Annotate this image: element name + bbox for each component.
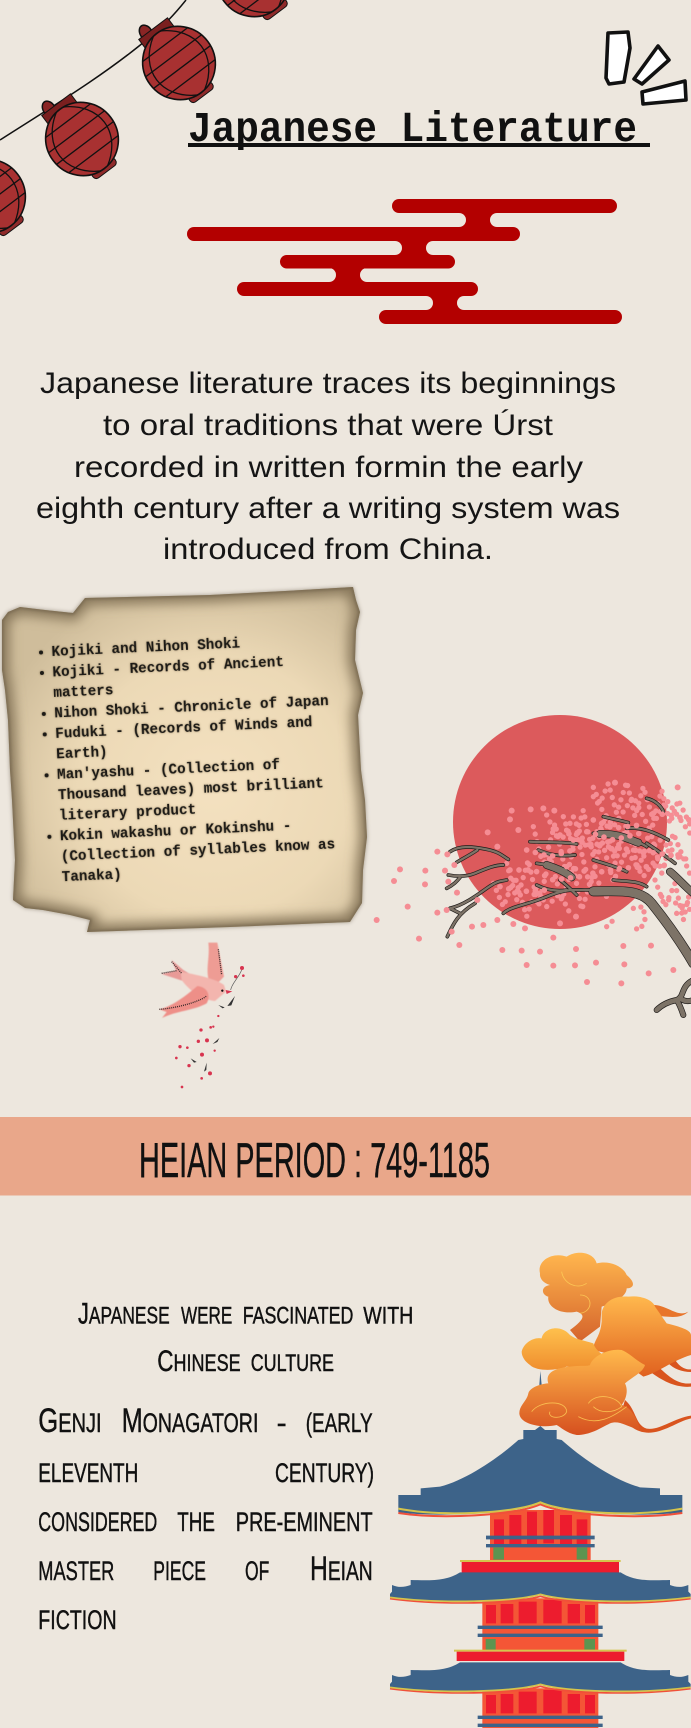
lantern string decoration bbox=[0, 0, 310, 253]
heading: fascination with Chinese culture: JAPANESE bbox=[78, 1298, 170, 1330]
middle roof bbox=[390, 1572, 691, 1603]
text block: Genji Monogatari description: MONAGATORI bbox=[122, 1402, 258, 1440]
intro paragraph: eighth century after a writing system was bbox=[36, 492, 620, 525]
panel: torn parchment list bbox=[2, 587, 367, 932]
banner: Heian period bbox=[0, 1117, 691, 1196]
lantern: left edge bbox=[0, 130, 46, 253]
blossoms in front of branches bbox=[500, 813, 690, 892]
text block: Genji Monogatari description: PRE-EMINENT bbox=[236, 1507, 373, 1537]
text block: Genji Monogatari description: FICTION bbox=[38, 1605, 117, 1635]
pagoda body tier 2 bbox=[454, 1598, 627, 1661]
illustration: swallow with blossoms bbox=[159, 943, 245, 1088]
list text: literary product bbox=[59, 803, 197, 825]
text block: Genji Monogatari description bbox=[38, 1402, 374, 1635]
list text: matters bbox=[53, 683, 114, 702]
lantern: top bbox=[190, 0, 310, 37]
list text: Tanaka) bbox=[61, 868, 122, 886]
text block: Genji Monogatari description: CONSIDERED bbox=[38, 1507, 157, 1537]
intro paragraph: introduced from China. bbox=[163, 533, 493, 566]
text block: Genji Monogatari description: - bbox=[277, 1408, 287, 1438]
lantern: second bbox=[116, 0, 236, 120]
list text: (Collection of syllables know as bbox=[61, 837, 335, 866]
icon: emphasis marks bbox=[606, 32, 686, 104]
illustration: red sun bbox=[453, 715, 667, 929]
text block: Genji Monogatari description: GENJI bbox=[38, 1402, 102, 1440]
intro paragraph: to oral traditions that were Úrst bbox=[103, 409, 553, 442]
text block: Genji Monogatari description: PIECE bbox=[153, 1556, 206, 1586]
cloud swirl highlights bbox=[532, 1272, 627, 1421]
dense blossoms behind branches bbox=[493, 782, 691, 930]
intro paragraph: recorded in written formin the early bbox=[74, 451, 583, 484]
list text bbox=[39, 633, 336, 887]
list text: Kojiki - Records of Ancient bbox=[52, 655, 284, 681]
icon: red cloud bands bbox=[187, 199, 622, 324]
heading: fascination with Chinese culture: WERE bbox=[181, 1302, 232, 1330]
list text: Man'yashu - (Collection of bbox=[57, 758, 280, 784]
pagoda body tier 3 bbox=[478, 1688, 603, 1728]
title: Japanese Literature bbox=[188, 105, 637, 154]
bottom roof bbox=[390, 1662, 691, 1693]
list text: Kokin wakashu or Kokinshu - bbox=[60, 819, 292, 845]
lantern: third bbox=[19, 73, 139, 196]
pagoda body tier 1 bbox=[460, 1510, 621, 1573]
text block: Genji Monogatari description: HEIAN bbox=[310, 1550, 373, 1588]
illustration: pagoda with clouds bbox=[390, 1253, 691, 1728]
clouds bbox=[519, 1253, 691, 1435]
text block: Genji Monogatari description: OF bbox=[245, 1556, 269, 1586]
heading: fascination with Chinese culture bbox=[78, 1298, 413, 1378]
text block: Genji Monogatari description: MASTER bbox=[38, 1556, 114, 1586]
heading: fascination with Chinese culture: CULTURE bbox=[251, 1350, 334, 1377]
text block: Genji Monogatari description: ELEVENTH bbox=[38, 1458, 138, 1488]
text block: Genji Monogatari description: THE bbox=[177, 1507, 215, 1537]
top roof bbox=[398, 1426, 682, 1516]
list text: Kojiki and Nihon Shoki bbox=[51, 636, 240, 661]
intro paragraph bbox=[36, 367, 620, 566]
scattered petals bbox=[374, 780, 681, 986]
heading: fascination with Chinese culture: FASCINATED bbox=[243, 1302, 353, 1330]
illustration: cherry blossom tree bbox=[374, 780, 691, 1015]
list text: Earth) bbox=[56, 745, 108, 763]
heading: fascination with Chinese culture: WITH bbox=[363, 1302, 413, 1330]
list text: Nihon Shoki - Chronicle of Japan bbox=[54, 694, 329, 722]
heading: fascination with Chinese culture: CHINESE bbox=[157, 1345, 241, 1378]
intro paragraph: Japanese literature traces its beginnings bbox=[40, 367, 616, 400]
text block: Genji Monogatari description: (EARLY bbox=[306, 1408, 373, 1438]
list text: Thousand leaves) most brilliant bbox=[58, 776, 324, 804]
list text: Fuduki - (Records of Winds and bbox=[55, 715, 313, 743]
text block: Genji Monogatari description: CENTURY) bbox=[275, 1458, 374, 1488]
